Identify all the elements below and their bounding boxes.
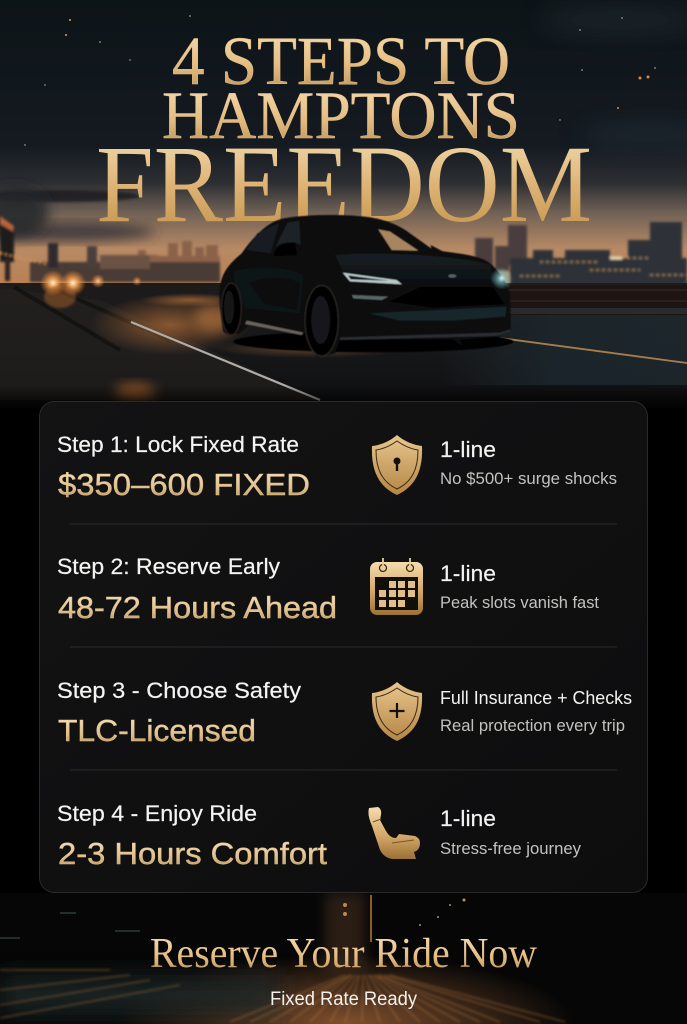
step 2 detail: 1-line — [440, 561, 496, 586]
step 4 detail: 1-line — [440, 806, 496, 831]
step 1 detail — [440, 437, 617, 488]
panel: four steps — [0, 385, 687, 893]
step 3 detail — [440, 687, 632, 735]
step 1 text: $350–600 FIXED — [58, 467, 310, 502]
car — [220, 215, 513, 357]
step 4 text: Step 4 - Enjoy Ride — [57, 801, 257, 826]
step 2 detail — [440, 561, 599, 612]
call to action subtext: Fixed Rate Ready — [270, 989, 417, 1010]
title: 4 STEPS TO — [172, 23, 510, 99]
title — [96, 23, 592, 245]
step 1 detail: 1-line — [440, 437, 496, 462]
step 3 text — [57, 678, 301, 748]
road — [0, 270, 687, 408]
title: HAMPTONS — [162, 77, 520, 153]
step 4 detail — [440, 806, 581, 858]
title: FREEDOM — [96, 123, 592, 245]
step 2 text: 48-72 Hours Ahead — [58, 590, 337, 625]
step 3 detail: Real protection every trip — [440, 716, 625, 735]
icon: keyhole shield — [372, 435, 422, 495]
step 2 detail: Peak slots vanish fast — [440, 593, 599, 612]
step 3 text: Step 3 - Choose Safety — [57, 678, 301, 703]
step 4 detail: Stress-free journey — [440, 839, 581, 858]
step 1 text — [57, 432, 310, 502]
icon: car seat — [368, 807, 420, 859]
step 2 text — [57, 554, 337, 625]
icon: calendar — [370, 558, 423, 615]
skyline — [0, 216, 687, 285]
call to action heading: Reserve Your Ride Now — [150, 931, 538, 977]
step 4 text — [57, 801, 327, 871]
step 4 text: 2-3 Hours Comfort — [58, 836, 327, 871]
step 3 text: TLC-Licensed — [58, 713, 256, 748]
step 2 text: Step 2: Reserve Early — [57, 554, 280, 579]
step 3 detail: Full Insurance + Checks — [440, 687, 632, 708]
bottom road motion background — [0, 893, 687, 1024]
icon: plus shield — [372, 682, 422, 741]
step 1 text: Step 1: Lock Fixed Rate — [57, 432, 299, 457]
step 1 detail: No $500+ surge shocks — [440, 469, 617, 488]
